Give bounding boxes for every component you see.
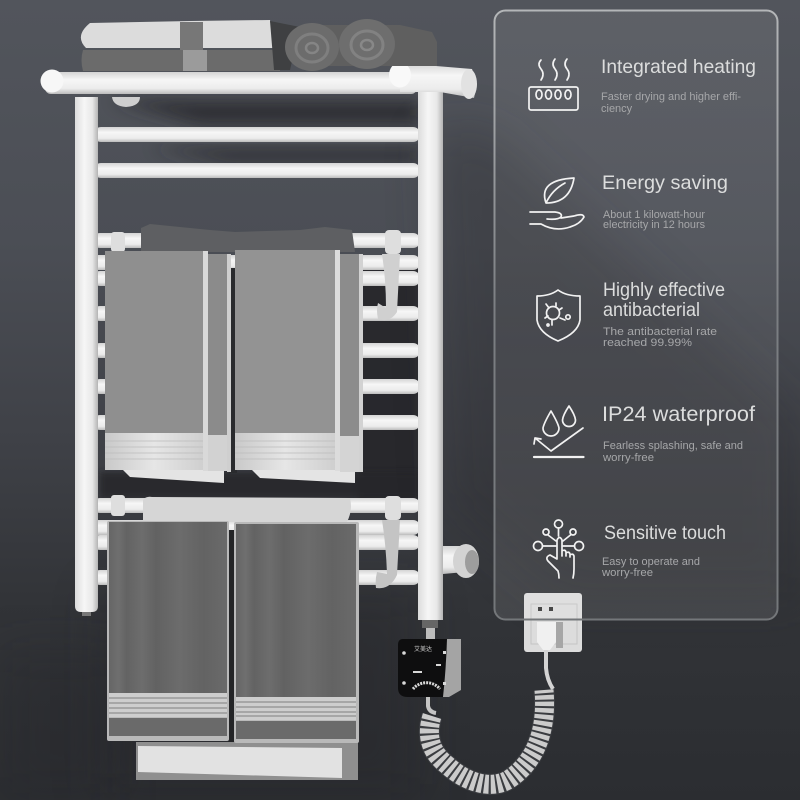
upper hanging towels <box>105 250 363 483</box>
dark towels behind upper rail <box>141 224 355 252</box>
feature: energy saving <box>530 172 728 231</box>
rolled towel two <box>339 19 395 69</box>
left upright <box>75 97 98 612</box>
icon: water drops and slope <box>534 406 584 457</box>
dark towel right <box>234 522 359 743</box>
description: Fearless splashing, safe and <box>603 440 743 452</box>
towel right <box>235 250 363 472</box>
hooks <box>111 230 401 588</box>
towel under-fold left <box>123 470 224 483</box>
description continuation: worry-free <box>602 452 654 464</box>
icon: heating coil and steam <box>529 59 578 110</box>
coiled cable <box>428 690 545 784</box>
plug <box>537 622 556 650</box>
icon: touch hand <box>534 520 584 578</box>
controller dial <box>413 683 440 689</box>
description continuation: worry-free <box>601 567 653 579</box>
description: About 1 kilowatt-hour <box>603 209 705 221</box>
white towel on lower rail <box>143 497 351 522</box>
grey towel band <box>183 50 207 71</box>
gap between towels <box>229 268 237 473</box>
feature: antibacterial <box>537 279 725 349</box>
heading: IP24 waterproof <box>602 403 755 426</box>
feature: waterproof <box>534 403 755 464</box>
towel fold dark edge <box>270 21 300 70</box>
shelf side tube <box>400 63 477 98</box>
description continuation: electricity in 12 hours <box>603 219 705 231</box>
description: The antibacterial rate <box>603 326 717 338</box>
controller brand text: 艾美达 <box>414 645 432 653</box>
heading: Sensitive touch <box>604 522 726 544</box>
shelf cap left <box>40 70 64 92</box>
lower hanging towels <box>107 521 359 780</box>
description: Easy to operate and <box>602 556 700 568</box>
heading line one: Highly effective <box>603 279 725 301</box>
shelf cap right <box>389 62 411 88</box>
valve connector <box>422 620 438 640</box>
heading: Integrated heating <box>601 56 756 78</box>
heading line two: antibacterial <box>603 299 700 321</box>
right upright <box>418 90 443 620</box>
icon: leaf on hand <box>530 178 584 229</box>
left upright end cap <box>82 612 91 616</box>
power cord <box>546 650 553 689</box>
grey folded towel <box>82 50 280 71</box>
towel stripe lines <box>109 698 356 716</box>
controller side <box>440 639 461 697</box>
description continuation: ciency <box>601 103 633 115</box>
wall socket <box>524 593 582 652</box>
controller buttons <box>402 651 446 685</box>
heating controller <box>398 639 461 697</box>
towel band stripes <box>105 441 335 459</box>
top shelf <box>45 72 417 94</box>
horizontal rails <box>90 127 420 585</box>
gap between lower towels <box>228 530 235 742</box>
description: Faster drying and higher effi- <box>601 91 741 103</box>
rolled towel one <box>285 23 339 71</box>
white folded towel bottom <box>138 746 342 778</box>
rack wall mount left <box>112 97 140 107</box>
top stacked towels <box>81 19 437 71</box>
towel under-fold right <box>252 470 355 483</box>
icon: shield with microbe <box>537 290 580 341</box>
feature: integrated heating <box>529 56 756 115</box>
white folded towel <box>81 20 274 48</box>
towel rack frame <box>40 62 479 640</box>
rolled towel backs <box>310 25 437 66</box>
dark towel left <box>107 521 229 741</box>
white towel band <box>180 22 203 50</box>
heading: Energy saving <box>602 172 728 194</box>
towel left <box>105 251 231 472</box>
shelf mount right <box>461 69 477 99</box>
controller face <box>398 639 447 697</box>
description continuation: reached 99.99% <box>603 337 692 349</box>
glass panel <box>494 10 778 620</box>
lower wall mount <box>443 544 479 578</box>
feature: sensitive touch <box>534 520 726 579</box>
white towel behind <box>136 742 358 780</box>
